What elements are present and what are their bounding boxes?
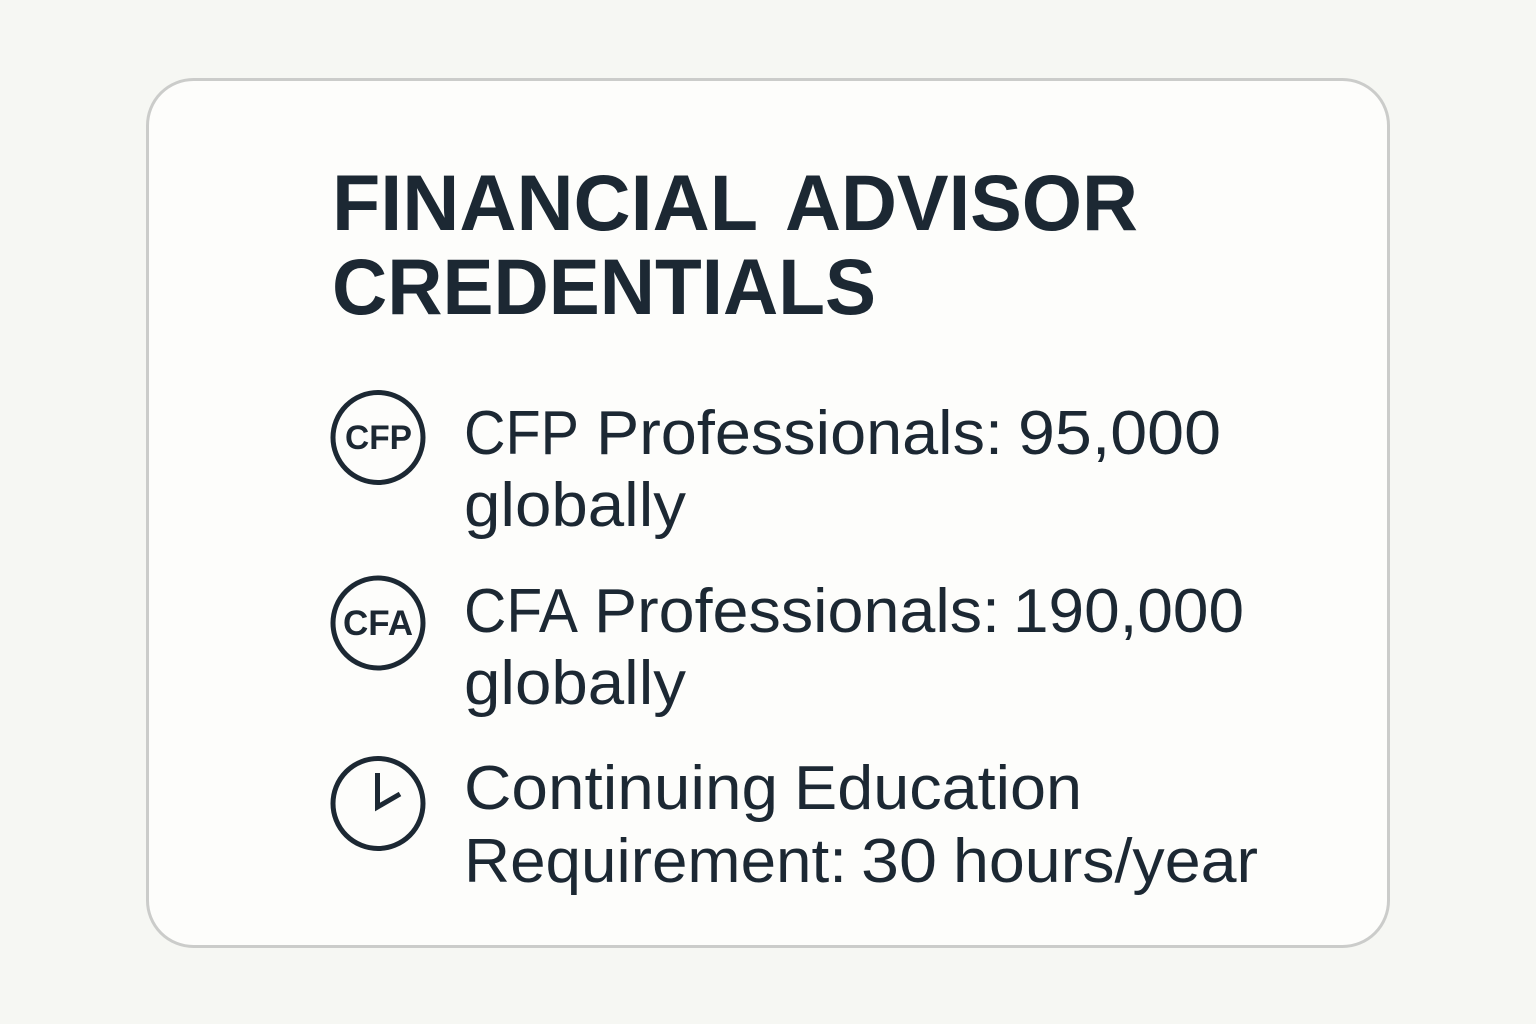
text: CFA professionals: Professionals: (594, 577, 1000, 646)
icon: CFA badge: CFA (343, 604, 413, 643)
panel: credentials card (148, 80, 1388, 946)
title: FINANCIAL (332, 158, 758, 247)
text: CFA professionals: CFA (464, 577, 579, 646)
icon: CFP badge (333, 392, 423, 482)
text: continuing education requirement: Education (794, 754, 1082, 823)
icon: CFP badge: CFP (345, 419, 412, 457)
title (332, 158, 1138, 331)
text: continuing education requirement: hours/year (953, 827, 1258, 896)
text: CFA professionals: globally (464, 649, 686, 718)
text: CFP professionals: globally (464, 471, 686, 540)
title: ADVISOR (785, 158, 1138, 247)
text: CFP professionals: CFP (464, 399, 579, 468)
icon: clock (333, 758, 423, 848)
text: continuing education requirement: 30 (861, 827, 937, 896)
text: CFA professionals: 190,000 (1013, 577, 1244, 646)
icon: CFA badge (333, 578, 423, 668)
title: CREDENTIALS (332, 242, 876, 331)
text: CFA professionals (464, 577, 1244, 718)
text: CFP professionals: Professionals: (596, 399, 1003, 468)
text: CFP professionals: 95,000 (1018, 399, 1221, 468)
text: continuing education requirement: Requirement: (464, 827, 847, 896)
text: CFP professionals (464, 399, 1221, 540)
text: continuing education requirement (464, 754, 1258, 896)
text: continuing education requirement: Continuing (464, 754, 778, 823)
